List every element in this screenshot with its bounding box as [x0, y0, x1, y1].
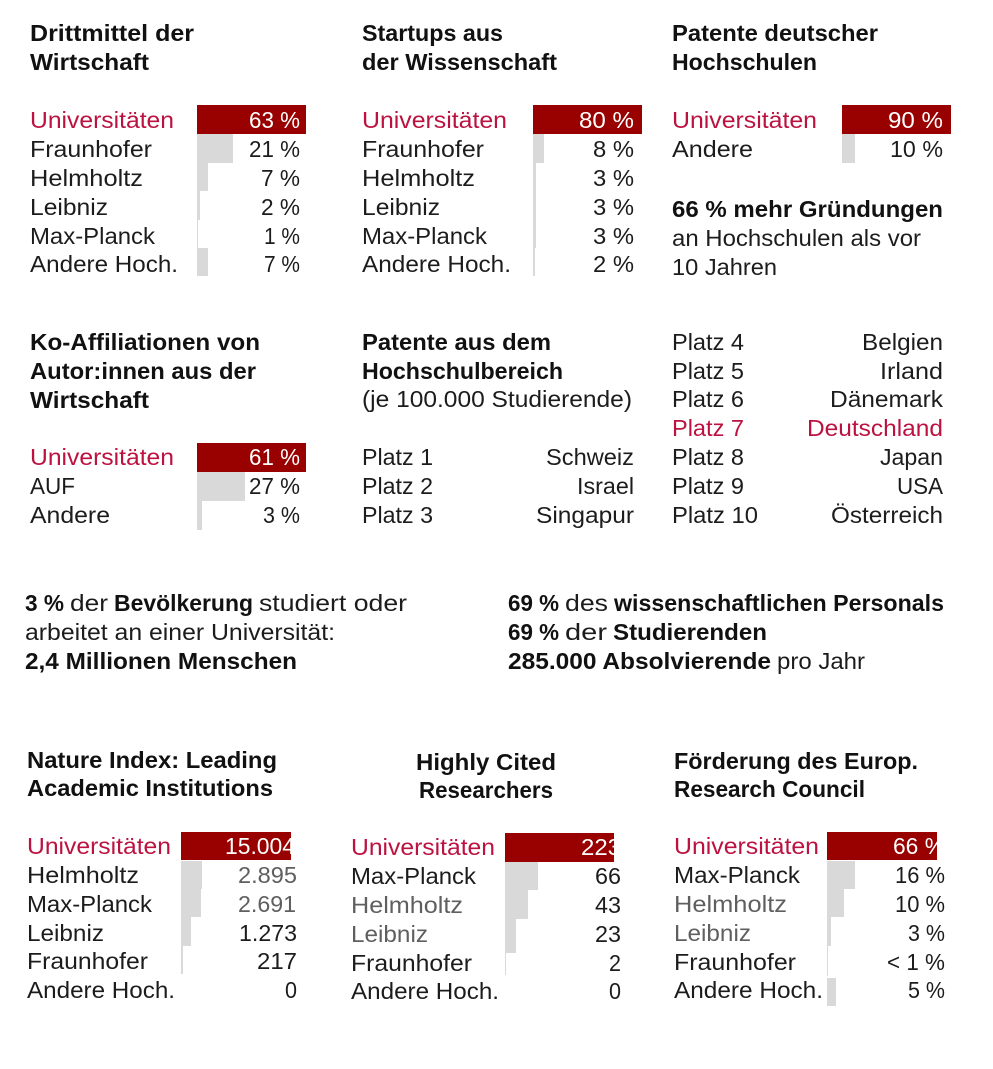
bar chart: Nature Index: 2.691	[238, 891, 296, 917]
heading: Nature Index	[27, 747, 277, 801]
bar chart: Startups: Leibniz	[362, 194, 440, 220]
text block: Personal und Studierende: des	[565, 590, 608, 616]
bar chart: Drittmittel: Andere Hoch.	[30, 251, 178, 277]
heading: Startups aus der Wissenschaft	[362, 20, 557, 75]
bar chart: Patente: 90 %	[888, 107, 943, 133]
bar chart: Europ. Research Council: Leibniz	[674, 920, 751, 946]
text block: Personal und Studierende: 69 %	[508, 590, 559, 616]
bar chart: Nature Index: 15.004	[225, 833, 295, 859]
heading: Patente aus dem Hochschulbereich: (je 100.000 Studierende)	[362, 386, 632, 412]
bar chart: Drittmittel: 7 %	[261, 165, 300, 191]
bar chart: Ko-Affiliationen: Andere	[30, 502, 110, 528]
bar chart: Europ. Research Council: Andere Hoch.	[674, 977, 823, 1003]
bar chart: Ko-Affiliationen: 61 %	[249, 444, 300, 470]
bar chart: Startups: 3 %	[593, 165, 634, 191]
bar chart: Highly Cited Researchers: 23	[595, 921, 621, 947]
ranking: Platz 1 bis 3: Platz 3	[362, 502, 433, 528]
heading: Drittmittel der Wirtschaft	[30, 20, 194, 75]
heading: Nature Index: Nature Index: Leading	[27, 747, 277, 773]
heading: Highly Cited Researchers: Highly Cited	[416, 749, 556, 775]
ranking: Platz 4 bis 10: Platz 10	[672, 502, 758, 528]
bar chart: Europ. Research Council: 5 %	[908, 977, 945, 1003]
text block: Personal und Studierende: wissenschaftlichen Personals	[613, 590, 944, 616]
bar chart: Europ. Research Council: 3 %	[908, 920, 945, 946]
heading: Ko-Affiliationen: Wirtschaft	[30, 387, 149, 413]
heading: Förderung des Europ. Research Council: Research Council	[674, 776, 865, 802]
ranking: Platz 1 bis 3	[362, 444, 634, 528]
bar chart: Nature Index: Max-Planck	[27, 891, 153, 917]
ranking: Platz 4 bis 10: Platz 9	[672, 473, 744, 499]
heading: Ko-Affiliationen	[30, 329, 260, 413]
heading: Highly Cited Researchers: Researchers	[419, 777, 553, 803]
bar chart: Startups: 80 %	[579, 107, 634, 133]
ranking: Platz 4 bis 10: Platz 6	[672, 386, 744, 412]
bar chart: Startups: Helmholtz	[362, 165, 475, 191]
ranking: Platz 4 bis 10: Platz 5	[672, 358, 744, 384]
heading: Patente aus dem Hochschulbereich: Patente aus dem	[362, 329, 551, 355]
panel: Patente deutscher Hochschulen	[672, 20, 951, 280]
heading: Ko-Affiliationen: Ko-Affiliationen von	[30, 329, 260, 355]
bar chart: Startups	[362, 105, 642, 277]
heading: Patente deutscher Hochschulen: Hochschulen	[672, 49, 817, 75]
bar chart: Europ. Research Council: 16 %	[895, 862, 945, 888]
bar chart: Startups: 3 %	[593, 194, 634, 220]
bar chart: Nature Index: 0	[285, 977, 297, 1003]
heading: Patente deutscher Hochschulen: Patente deutscher	[672, 20, 878, 46]
ranking: Platz 1 bis 3: Schweiz	[546, 444, 634, 470]
bar chart: Nature Index: Universitäten	[27, 833, 171, 859]
bar chart: Europ. Research Council: Max-Planck	[674, 862, 801, 888]
bar chart: Europ. Research Council: Universitäten	[674, 833, 819, 859]
bar chart: Highly Cited Researchers: Helmholtz	[351, 892, 463, 918]
bar chart: Highly Cited Researchers: Max-Planck	[351, 863, 477, 889]
bar chart: Europ. Research Council: < 1 %	[887, 949, 945, 975]
bar chart: Patente: Andere	[672, 136, 753, 162]
bar chart: Drittmittel	[30, 105, 306, 277]
ranking: Platz 4 bis 10: Irland	[880, 358, 943, 384]
heading: Startups aus der Wissenschaft: Startups aus	[362, 20, 503, 46]
heading: Förderung des Europ. Research Council: Förderung des Europ.	[674, 748, 918, 774]
ranking: Platz 4 bis 10	[672, 329, 944, 528]
text block: Personal und Studierende: der	[565, 619, 607, 645]
text block: Bevölkerung: arbeitet an einer Universität:	[25, 619, 335, 645]
heading: Ko-Affiliationen: Autor:innen aus der	[30, 358, 256, 384]
text block: Bevölkerung: der	[70, 590, 108, 616]
bar chart: Ko-Affiliationen: 27 %	[249, 473, 300, 499]
bar chart: Nature Index: 217	[257, 948, 297, 974]
bar chart: Drittmittel: 21 %	[249, 136, 300, 162]
heading: Drittmittel der Wirtschaft: Drittmittel der	[30, 20, 194, 46]
bar chart: Europ. Research Council: 66 %	[893, 833, 945, 859]
heading: Startups aus der Wissenschaft: der Wissenschaft	[362, 49, 557, 75]
text block: Gründungen: 10 Jahren	[672, 254, 777, 280]
bar chart: Drittmittel: Leibniz	[30, 194, 108, 220]
bar chart: Patente: Universitäten	[672, 107, 817, 133]
text block: Gründungen	[672, 196, 943, 280]
bar chart: Startups: 2 %	[593, 251, 634, 277]
bar chart: Ko-Affiliationen: AUF	[30, 473, 75, 499]
ranking: Platz 4 bis 10: Platz 7	[672, 415, 744, 441]
ranking: Platz 4 bis 10: Deutschland	[807, 415, 943, 441]
ranking: Platz 1 bis 3: Platz 1	[362, 444, 433, 470]
text block: Personal und Studierende: Studierenden	[613, 619, 767, 645]
bar chart: Startups: Universitäten	[362, 107, 507, 133]
bar chart: Nature Index: Helmholtz	[27, 862, 139, 888]
bar chart: Drittmittel: Fraunhofer	[30, 136, 152, 162]
panel: Patente aus dem Hochschulbereich	[362, 329, 634, 528]
bar chart: Highly Cited Researchers: Andere Hoch.	[351, 978, 499, 1004]
heading: Nature Index: Academic Institutions	[27, 775, 273, 801]
text block: Gründungen: an Hochschulen als vor	[672, 225, 921, 251]
bar chart: Drittmittel: 7 %	[264, 251, 300, 277]
bar chart: Nature Index: Fraunhofer	[27, 948, 148, 974]
bar chart: Patente	[672, 105, 951, 163]
bar chart: Europ. Research Council: 10 %	[895, 891, 945, 917]
bar chart: Startups: Fraunhofer	[362, 136, 484, 162]
bar chart: Highly Cited Researchers: 223	[581, 834, 621, 860]
text block: Personal und Studierende	[508, 590, 944, 674]
bar chart: Drittmittel: 2 %	[261, 194, 300, 220]
heading: Drittmittel der Wirtschaft: Wirtschaft	[30, 49, 149, 75]
bar chart: Highly Cited Researchers: Leibniz	[351, 921, 428, 947]
panel: Nature Index	[27, 747, 297, 1003]
bar chart: Startups: 8 %	[593, 136, 634, 162]
bar chart: Europ. Research Council: Helmholtz	[674, 891, 787, 917]
ranking: Platz 4 bis 10: Platz 4	[672, 329, 744, 355]
bar chart: Nature Index	[27, 832, 297, 1003]
ranking: Platz 4 bis 10: Platz 8	[672, 444, 744, 470]
bar chart: Highly Cited Researchers: Universitäten	[351, 834, 495, 860]
bar chart: Highly Cited Researchers: 66	[595, 863, 621, 889]
ranking: Platz 4 bis 10: USA	[897, 473, 944, 499]
bar chart: Europ. Research Council	[674, 832, 945, 1006]
heading: Patente aus dem Hochschulbereich: Hochschulbereich	[362, 358, 563, 384]
bar chart: Highly Cited Researchers: Fraunhofer	[351, 950, 472, 976]
bar chart: Startups: Andere Hoch.	[362, 251, 511, 277]
text block: Bevölkerung	[25, 590, 407, 674]
text block: Bevölkerung: Bevölkerung	[114, 590, 253, 616]
text block: Personal und Studierende: 285.000 Absolvierende	[508, 648, 771, 674]
text block: Gründungen: 66 % mehr Gründungen	[672, 196, 943, 222]
heading: Patente aus dem Hochschulbereich	[362, 329, 632, 412]
bar chart: Highly Cited Researchers: 43	[595, 892, 621, 918]
panel: Ko-Affiliationen	[30, 329, 306, 530]
heading: Patente deutscher Hochschulen	[672, 20, 878, 75]
heading: Highly Cited Researchers	[416, 749, 556, 803]
bar chart: Ko-Affiliationen: Universitäten	[30, 444, 174, 470]
text block: Personal und Studierende: 69 %	[508, 619, 559, 645]
ranking: Platz 4 bis 10: Japan	[880, 444, 943, 470]
bar chart: Drittmittel: Universitäten	[30, 107, 174, 133]
bar chart: Startups: Max-Planck	[362, 223, 488, 249]
bar chart: Ko-Affiliationen: 3 %	[263, 502, 300, 528]
bar chart: Drittmittel: Helmholtz	[30, 165, 143, 191]
heading: Förderung des Europ. Research Council	[674, 748, 918, 802]
bar chart: Highly Cited Researchers	[351, 833, 621, 1004]
text block: Bevölkerung: studiert oder	[259, 590, 407, 616]
panel: Drittmittel der Wirtschaft	[30, 20, 306, 277]
bar chart: Nature Index: 2.895	[238, 862, 297, 888]
bar chart: Nature Index: Leibniz	[27, 920, 104, 946]
text block: Personal und Studierende: pro Jahr	[777, 648, 865, 674]
ranking: Platz 4 bis 10: Belgien	[862, 329, 943, 355]
bar chart: Drittmittel: 63 %	[249, 107, 300, 133]
panel: Highly Cited Researchers	[351, 749, 621, 1004]
bar chart: Nature Index: 1.273	[239, 920, 297, 946]
ranking: Platz 1 bis 3: Israel	[577, 473, 634, 499]
ranking: Platz 4 bis 10: Österreich	[831, 502, 943, 528]
panel: Startups aus der Wissenschaft	[362, 20, 642, 277]
bar chart: Europ. Research Council: Fraunhofer	[674, 949, 796, 975]
bar chart: Nature Index: Andere Hoch.	[27, 977, 175, 1003]
ranking: Platz 1 bis 3: Platz 2	[362, 473, 433, 499]
bar chart: Drittmittel: Max-Planck	[30, 223, 156, 249]
ranking: Platz 4 bis 10: Dänemark	[830, 386, 944, 412]
text block: Bevölkerung: 3 %	[25, 590, 64, 616]
bar chart: Patente: 10 %	[890, 136, 943, 162]
text block: Bevölkerung: 2,4 Millionen Menschen	[25, 648, 297, 674]
panel: Förderung des Europ. Research Council	[674, 748, 945, 1006]
bar chart: Highly Cited Researchers: 2	[609, 950, 621, 976]
ranking: Platz 1 bis 3: Singapur	[536, 502, 634, 528]
bar chart: Ko-Affiliationen	[30, 443, 306, 530]
bar chart: Drittmittel: 1 %	[264, 223, 300, 249]
bar chart: Startups: 3 %	[593, 223, 634, 249]
bar chart: Highly Cited Researchers: 0	[609, 978, 621, 1004]
